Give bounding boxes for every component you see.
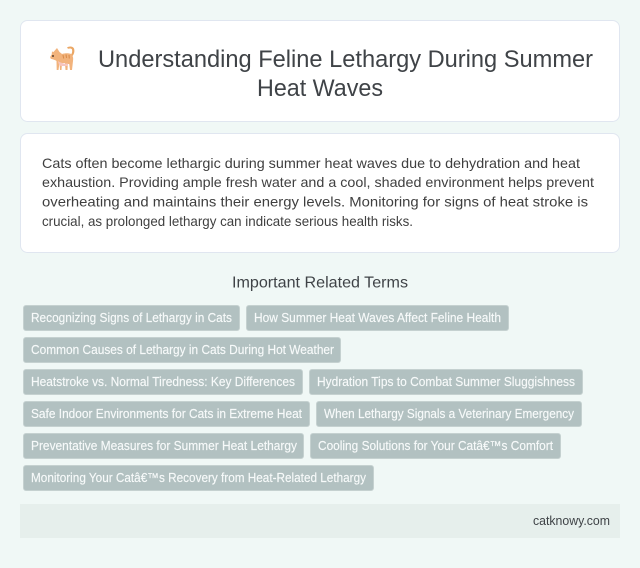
tag: preventative measures: [24, 434, 304, 458]
tag: monitoring recovery: Monitoring Your Catâ€™s Recovery from Heat-Related Lethargy: [31, 471, 367, 485]
heading: Understanding Feline Lethargy During Summer: [98, 46, 593, 73]
tag: heat waves health: [246, 306, 508, 330]
tag: safe indoor: [24, 402, 310, 426]
panel: description: [20, 134, 620, 252]
heading: related terms: Important Related Terms: [232, 274, 408, 292]
tag: safe indoor: Safe Indoor Environments for Cats in Extreme Heat: [31, 407, 302, 421]
tag: monitoring recovery: [24, 466, 374, 490]
tag: preventative measures: Preventative Measures for Summer Heat Lethargy: [31, 439, 298, 453]
tag: cooling solutions: Cooling Solutions for Your Catâ€™s Comfort: [318, 439, 553, 453]
icon: cat: [50, 46, 74, 70]
tag: veterinary emergency: When Lethargy Signals a Veterinary Emergency: [324, 407, 575, 421]
footer source text: catknowy.com: [533, 513, 610, 528]
tag: recognizing signs: [24, 306, 240, 330]
tag: recognizing signs: Recognizing Signs of Lethargy in Cats: [31, 311, 232, 325]
title panel: [20, 20, 620, 122]
text block: description: overheating and maintains their energy levels. Monitoring for signs of heat stroke is: [42, 194, 588, 210]
tag: hydration tips: [310, 370, 582, 394]
text block: description: Cats often become lethargic during summer heat waves due to dehydration and heat: [42, 155, 580, 171]
footer: [20, 504, 620, 538]
text block: description: exhaustion. Providing ample fresh water and a cool, shaded environment helps prevent: [42, 174, 594, 190]
tag: heat waves health: How Summer Heat Waves Affect Feline Health: [254, 311, 501, 325]
tag list: [24, 306, 582, 490]
tag: common causes: [24, 338, 340, 362]
heading: [98, 46, 593, 102]
tag: cooling solutions: [310, 434, 560, 458]
tag: heatstroke vs tiredness: [24, 370, 302, 394]
tag: heatstroke vs tiredness: Heatstroke vs. Normal Tiredness: Key Differences: [31, 375, 295, 389]
heading: Heat Waves: [257, 75, 383, 102]
tag: hydration tips: Hydration Tips to Combat Summer Sluggishness: [317, 375, 575, 389]
text block: description: crucial, as prolonged lethargy can indicate serious health risks.: [42, 213, 413, 229]
tag: veterinary emergency: [316, 402, 582, 426]
text block: description: [42, 155, 594, 229]
tag: common causes: Common Causes of Lethargy in Cats During Hot Weather: [31, 343, 334, 357]
